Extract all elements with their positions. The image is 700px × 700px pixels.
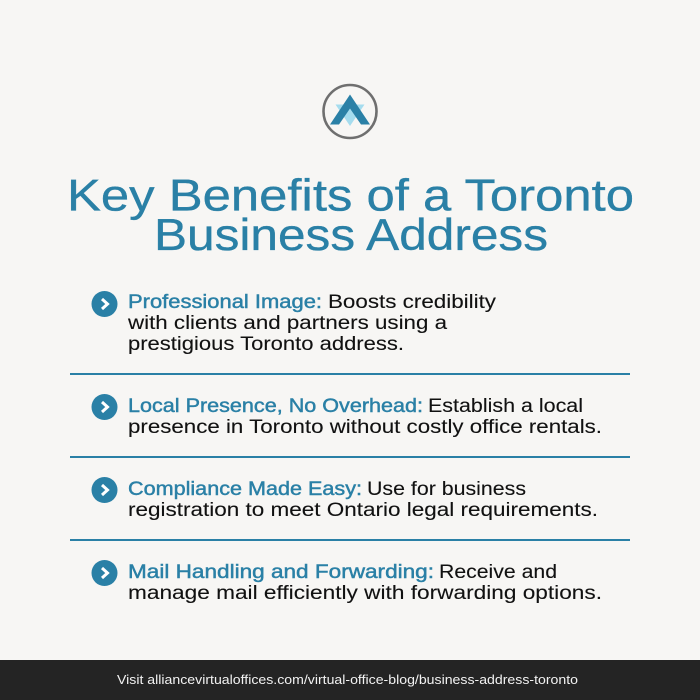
benefit: local presence: presence in Toronto without costly office rentals.	[128, 417, 602, 438]
benefit: professional image	[92, 291, 497, 355]
footer bar: Visit alliancevirtualoffices.com/virtual-office-blog/business-address-toronto	[117, 673, 578, 687]
benefit: mail handling: Mail Handling and Forwarding:	[128, 562, 434, 583]
benefit: mail handling: Receive and	[439, 562, 557, 583]
benefit: compliance: Compliance Made Easy:	[128, 479, 362, 500]
benefit: professional image: Boosts credibility	[328, 292, 497, 313]
title	[67, 172, 634, 260]
benefit: compliance: registration to meet Ontario legal requirements.	[128, 500, 598, 521]
benefit: professional image: with clients and partners using a	[127, 313, 447, 334]
title: Key Benefits of a Toronto	[67, 172, 634, 220]
benefit: mail handling: manage mail efficiently with forwarding options.	[128, 583, 602, 604]
benefit: professional image: Professional Image:	[128, 292, 322, 313]
footer bar	[0, 660, 700, 700]
benefit: professional image: prestigious Toronto address.	[128, 334, 404, 355]
benefit: local presence: Establish a local	[428, 396, 583, 417]
benefit: compliance: Use for business	[367, 479, 526, 500]
icon: company logo	[324, 85, 376, 138]
title: Business Address	[154, 211, 548, 260]
benefit: mail handling	[92, 560, 602, 604]
benefit: local presence: Local Presence, No Overhead:	[128, 396, 423, 417]
benefit: compliance	[92, 477, 598, 521]
benefit: local presence	[92, 394, 602, 438]
